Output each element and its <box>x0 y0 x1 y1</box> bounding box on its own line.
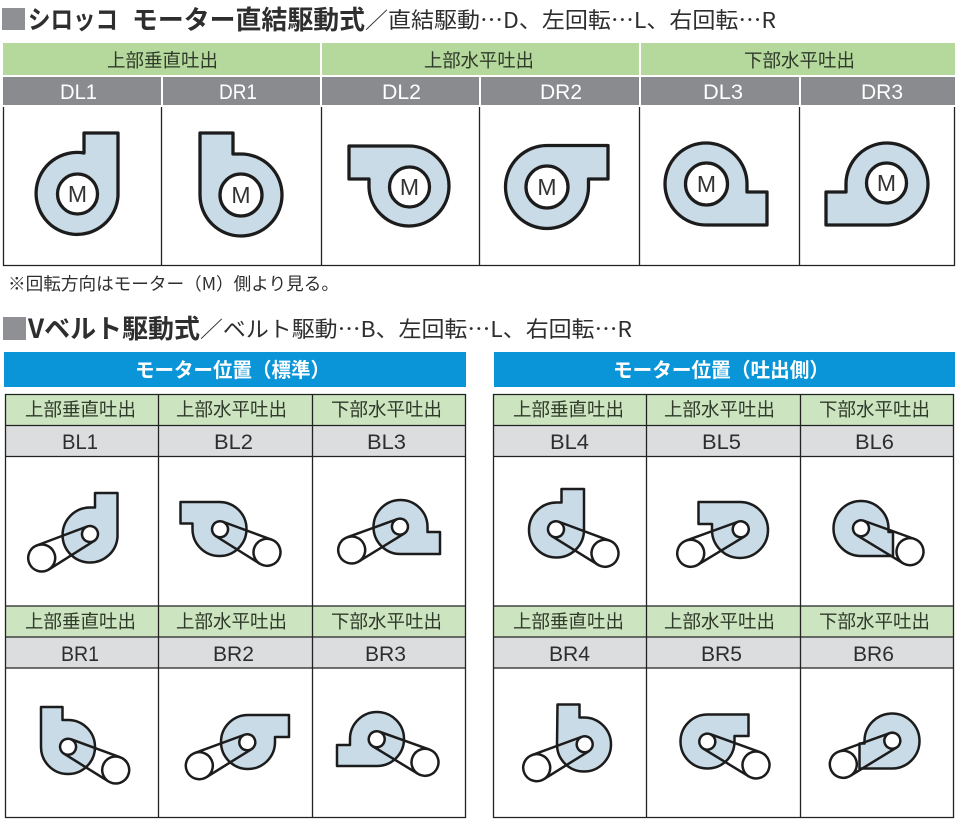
icon: BR2 <box>181 715 289 784</box>
heading: direct drive: モーター直結駆動式 <box>132 0 365 37</box>
labels: top row: 上部水平吐出 <box>176 396 287 422</box>
panel: discharge side position table <box>494 394 954 818</box>
icon: BL5 <box>673 502 768 571</box>
labels: bottom row: 下部水平吐出 <box>331 608 442 634</box>
icon: DR1: M <box>231 182 251 208</box>
labels: top row: 下部水平吐出 <box>819 396 930 422</box>
icon: BL2 <box>180 502 285 570</box>
labels: bottom row: BR6 <box>853 643 894 666</box>
labels: bottom row: BR5 <box>701 643 742 666</box>
green header row: 下部水平吐出 <box>744 47 855 73</box>
icon: DR3: M <box>877 170 896 196</box>
labels: top row: BL6 <box>855 431 894 454</box>
labels: bottom row: BR3 <box>365 643 406 666</box>
gray code row: DL3 <box>703 81 743 104</box>
icon: DR2 <box>505 146 608 228</box>
labels: top row: BL5 <box>702 431 741 454</box>
labels: top row: BL4 <box>550 431 589 454</box>
heading: direct drive: シロッコ <box>28 0 118 37</box>
labels: bottom row: 下部水平吐出 <box>819 608 930 634</box>
labels: top row: 下部水平吐出 <box>331 396 442 422</box>
heading: direct drive: ／直結駆動…D、左回転…L、右回転…R <box>365 3 776 35</box>
labels: bottom row: BR1 <box>61 643 99 666</box>
labels: bottom row: BR4 <box>549 643 590 666</box>
icon: DR3 <box>826 143 928 225</box>
labels: top row: BL2 <box>214 431 253 454</box>
gray code row: DR1 <box>219 81 257 104</box>
icon: BR1 <box>41 707 134 788</box>
heading: direct drive <box>2 0 776 37</box>
green header row <box>3 43 955 75</box>
labels: top row <box>513 396 930 454</box>
green header row: 上部垂直吐出 <box>107 47 218 73</box>
gray code row: DR2 <box>540 81 582 104</box>
panel: standard position table <box>6 394 466 818</box>
icon: BL4 <box>529 489 623 571</box>
labels: bottom row: 上部垂直吐出 <box>513 608 624 634</box>
icon: BL6 <box>833 501 928 570</box>
icon: DR2: M <box>537 174 557 200</box>
labels: top row: 上部垂直吐出 <box>25 396 136 422</box>
icon: BR5 <box>680 714 774 783</box>
icon: BR4 <box>519 704 611 786</box>
note: ※回転方向はモーター（M）側より見る。 <box>8 271 339 296</box>
green header row: 上部水平吐出 <box>424 47 534 73</box>
labels: top row <box>25 396 442 454</box>
labels: top row: BL3 <box>367 431 406 454</box>
icon: DL3: M <box>697 171 716 197</box>
icon: BR6 <box>825 714 920 782</box>
panel: direct drive table <box>3 43 955 266</box>
labels: bottom row: BR2 <box>213 643 254 666</box>
heading: V-belt drive <box>3 309 632 346</box>
gray code row: DL2 <box>382 81 421 104</box>
labels: top row: BL1 <box>62 431 98 454</box>
icon: BL1 <box>24 493 118 576</box>
banner: motor position discharge side <box>494 352 955 387</box>
heading: V-belt drive: Vベルト駆動式 <box>27 309 200 346</box>
labels: top row: 上部垂直吐出 <box>513 396 624 422</box>
icon: BR3 <box>337 712 443 780</box>
gray code row: DR3 <box>861 81 903 104</box>
icon: DL2 <box>349 146 449 226</box>
icon: DL2: M <box>400 174 419 200</box>
banner: motor position discharge side: モーター位置（吐出側） <box>613 354 829 383</box>
icon: DR1 <box>200 133 282 236</box>
banner: motor position standard <box>4 352 466 387</box>
labels: bottom row: 上部水平吐出 <box>664 608 775 634</box>
banner: motor position standard: モーター位置（標準） <box>135 354 330 383</box>
icon: BL3 <box>334 500 440 568</box>
labels: bottom row: 上部水平吐出 <box>176 608 287 634</box>
labels: top row: 上部水平吐出 <box>664 396 775 422</box>
labels: bottom row: 上部垂直吐出 <box>25 608 136 634</box>
icon: DL1: M <box>68 181 87 207</box>
labels: bottom row <box>513 608 930 666</box>
gray code row <box>3 77 955 105</box>
heading: V-belt drive: ／ベルト駆動…B、左回転…L、右回転…R <box>200 312 632 344</box>
gray code row: DL1 <box>60 81 97 104</box>
icon: DL1 <box>36 133 118 234</box>
labels: bottom row <box>25 608 442 666</box>
icon: DL3 <box>665 143 767 225</box>
